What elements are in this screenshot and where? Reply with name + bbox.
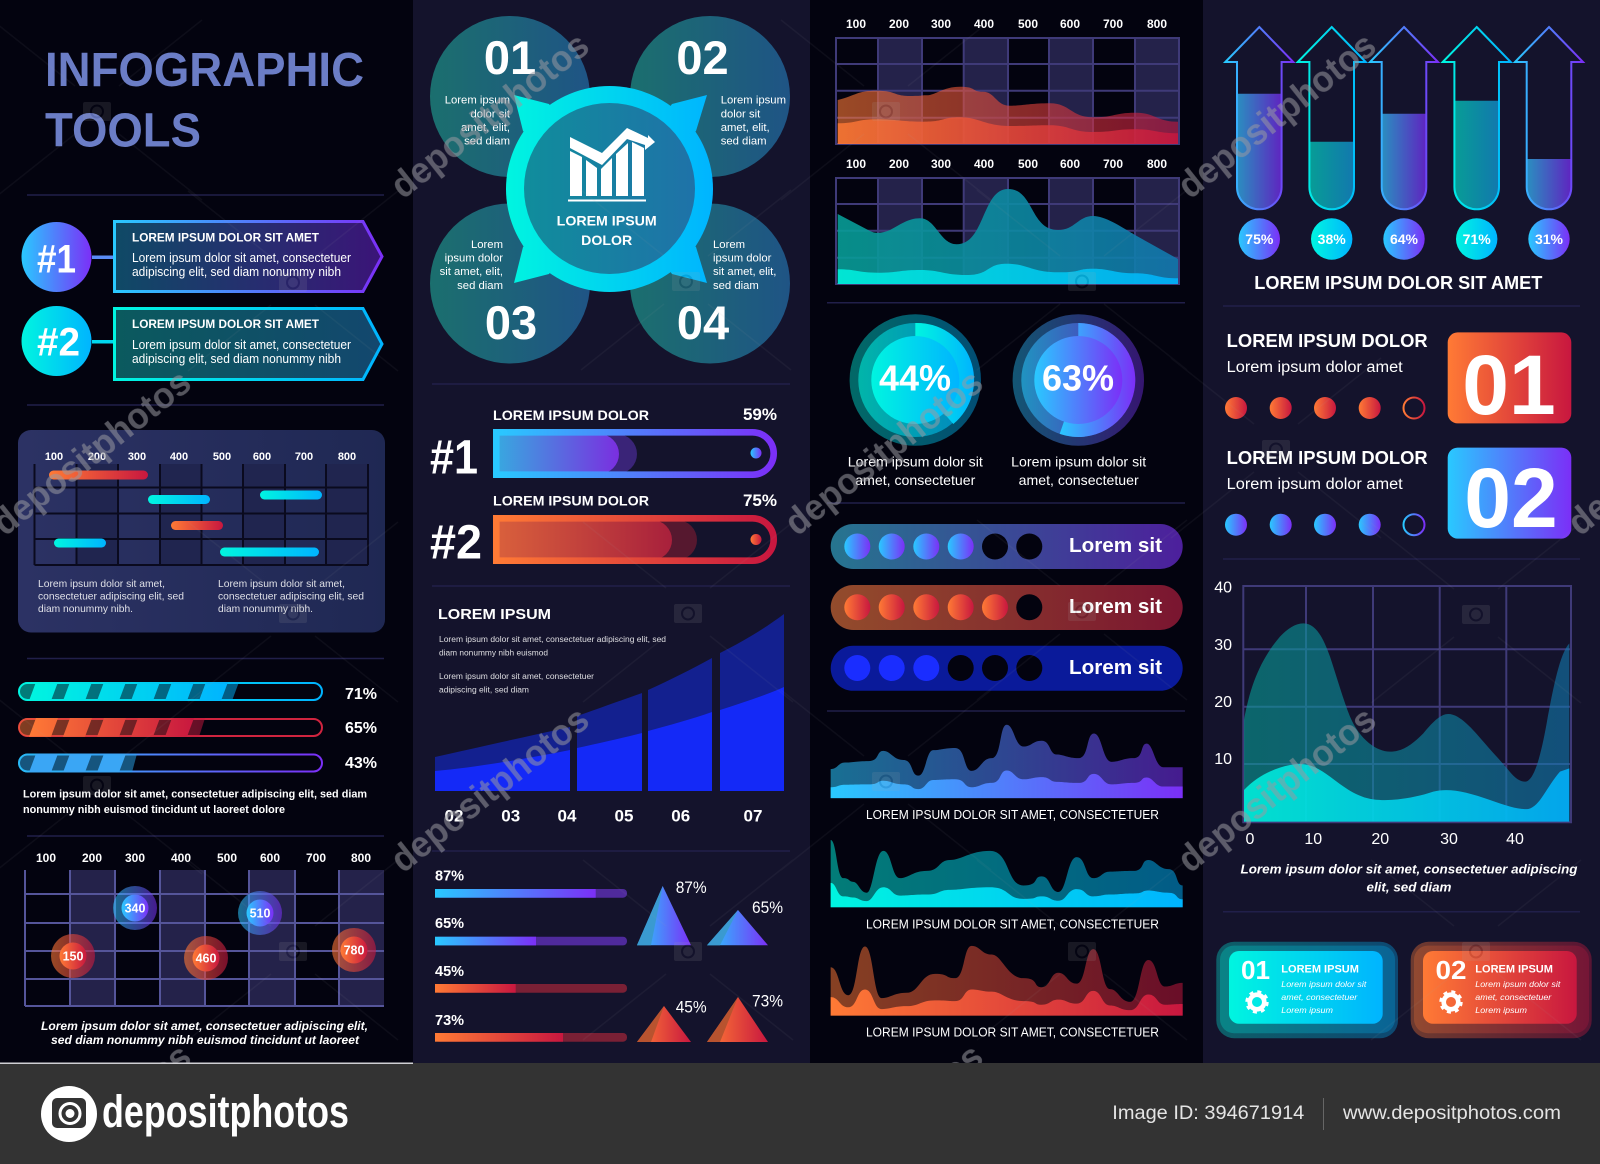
gantt axis labels: 300 xyxy=(128,451,146,463)
pill meter #2: #2 xyxy=(430,517,482,570)
mountain chart cyan: LOREM IPSUM DOLOR SIT AMET, CONSECTETUER xyxy=(866,918,1159,932)
card 02: Lorem ipsum dolor sit xyxy=(1475,979,1561,989)
gantt notes: consectetuer adipiscing elit, sed xyxy=(38,590,184,602)
bubble 150 xyxy=(51,934,95,978)
bubble axis labels: 600 xyxy=(260,851,280,865)
axis labels: 300 xyxy=(931,17,951,31)
chart description: diam nonummy nibh euismod xyxy=(439,649,548,658)
gantt axis labels: 600 xyxy=(253,451,271,463)
watermark overlay: depositphotos xyxy=(382,698,597,880)
card 02: 02 xyxy=(1436,955,1466,985)
chart description: Lorem ipsum dolor sit amet, consectetuer xyxy=(439,672,594,681)
pyramid 73%: 73% xyxy=(752,992,783,1011)
bubble axis labels: 100 xyxy=(36,851,56,865)
petal 04: 04 xyxy=(677,296,729,349)
card 01 xyxy=(1216,942,1398,1038)
teal area chart xyxy=(836,157,1179,284)
petal 04: sed diam xyxy=(713,280,759,292)
callout #1: Lorem ipsum dolor sit amet, consectetuer xyxy=(132,251,351,265)
chart caption xyxy=(1240,861,1578,894)
petal 02 xyxy=(630,16,790,177)
pyramid 45%: 45% xyxy=(676,998,707,1017)
arrow tube 71%: 71% xyxy=(1463,231,1491,247)
bar 73%: 73% xyxy=(435,1013,464,1029)
bubble axis labels: 400 xyxy=(171,851,191,865)
watermark overlay: depositphotos xyxy=(382,24,597,206)
progress note xyxy=(23,789,367,816)
chart description: adipiscing elit, sed diam xyxy=(439,686,529,695)
axis labels xyxy=(846,157,1167,171)
center label: DOLOR xyxy=(581,232,632,248)
tubes heading: LOREM IPSUM DOLOR SIT AMET xyxy=(1254,273,1542,293)
axis labels: 500 xyxy=(1018,17,1038,31)
badge #1 xyxy=(22,222,92,292)
bar 87% xyxy=(435,869,627,898)
arrow tube 75%: 75% xyxy=(1245,231,1274,247)
bubble axis labels: 800 xyxy=(351,851,371,865)
x axis labels: 0 xyxy=(1246,831,1255,848)
area axis labels: 06 xyxy=(671,807,690,826)
title: TOOLS xyxy=(45,104,201,158)
bubble 340: 340 xyxy=(125,902,145,916)
watermark overlay: depositphotos xyxy=(1169,24,1384,206)
pill meter #2: 75% xyxy=(743,491,777,510)
axis labels: 200 xyxy=(889,17,909,31)
bar 65%: 65% xyxy=(435,916,464,932)
mountain chart red: LOREM IPSUM DOLOR SIT AMET, CONSECTETUER xyxy=(866,1026,1159,1040)
badge #2 xyxy=(22,306,92,376)
mountain chart cyan xyxy=(831,840,1183,932)
axis labels: 400 xyxy=(974,17,994,31)
petal 02: Lorem ipsum xyxy=(721,95,786,107)
pyramid 87% xyxy=(637,878,707,945)
icon: bar chart with trend arrow xyxy=(568,128,655,202)
petal 01: sed diam xyxy=(464,136,510,148)
title xyxy=(45,43,364,158)
area axis labels: 04 xyxy=(558,807,577,826)
callout #2: Lorem ipsum dolor sit amet, consectetuer xyxy=(132,338,351,352)
score block 01: LOREM IPSUM DOLOR xyxy=(1227,331,1428,351)
petal 03: sed diam xyxy=(457,280,503,292)
pyramid 45% xyxy=(637,998,707,1042)
petal 01: 01 xyxy=(484,31,536,84)
bubble 780 xyxy=(332,928,376,972)
arrow tube 71% xyxy=(1443,27,1511,260)
pyramid 73% xyxy=(707,992,783,1042)
x axis labels xyxy=(1246,831,1524,848)
area columns xyxy=(435,614,784,791)
bubble 340 xyxy=(113,886,157,930)
arrow tube 38% xyxy=(1298,27,1366,260)
callout #2: adipiscing elit, sed diam nonummy nibh xyxy=(132,352,341,366)
bar 71%: 71% xyxy=(345,686,377,703)
callout #1: adipiscing elit, sed diam nonummy nibh xyxy=(132,265,341,279)
logo xyxy=(41,1086,349,1142)
image id: Image ID: 394671914 xyxy=(1112,1102,1304,1124)
area axis labels: 05 xyxy=(615,807,633,826)
arrow tube 38%: 38% xyxy=(1318,231,1346,247)
petal 02: 02 xyxy=(676,31,729,84)
rating pill 2 xyxy=(831,585,1183,630)
gantt notes: diam nonummy nibh. xyxy=(38,603,133,615)
axis labels: 600 xyxy=(1060,157,1080,171)
y axis labels xyxy=(1214,580,1232,768)
bar 71% xyxy=(18,682,377,703)
bubble axis labels: 300 xyxy=(125,851,145,865)
gantt notes xyxy=(38,578,364,615)
arrow tube 64% xyxy=(1370,27,1438,260)
rating pill 2: Lorem sit xyxy=(1069,596,1162,618)
gantt notes: consectetuer adipiscing elit, sed xyxy=(218,590,364,602)
large area chart xyxy=(1214,580,1578,894)
card 01: LOREM IPSUM xyxy=(1281,963,1359,975)
pill meter #1: 59% xyxy=(743,405,777,424)
petal 02: amet, elit, xyxy=(721,122,770,134)
bubble caption: sed diam nonummy nibh euismod tincidunt ut laoreet xyxy=(51,1033,360,1047)
score block 02: 02 xyxy=(1464,451,1558,545)
bubble caption: Lorem ipsum dolor sit amet, consectetuer adipiscing elit, xyxy=(41,1019,368,1033)
axis labels: 300 xyxy=(931,157,951,171)
callout #1 xyxy=(22,222,382,292)
donut 63%: amet, consectetuer xyxy=(1019,472,1139,488)
area axis labels: 02 xyxy=(445,807,463,826)
callout #2 xyxy=(22,306,382,380)
growth area chart xyxy=(435,606,784,826)
donut 63%: 63% xyxy=(1042,358,1114,399)
arrow box #1 xyxy=(114,222,382,292)
petal 03: Lorem xyxy=(471,239,503,251)
area axis labels xyxy=(445,807,762,826)
progress note: Lorem ipsum dolor sit amet, consectetuer adipiscing elit, sed diam xyxy=(23,789,367,801)
x axis labels: 40 xyxy=(1506,831,1524,848)
bubble caption xyxy=(41,1019,368,1047)
central star badge xyxy=(514,95,707,283)
red area chart xyxy=(836,17,1179,144)
gantt bars xyxy=(49,470,322,556)
gantt axis labels: 100 xyxy=(45,451,63,463)
petal diagram xyxy=(430,16,790,364)
score block 01 xyxy=(1225,331,1571,432)
site url: www.depositphotos.com xyxy=(1342,1102,1561,1124)
center label: LOREM IPSUM xyxy=(557,213,657,229)
card 02: Lorem ipsum xyxy=(1475,1005,1527,1015)
pill meter #2: LOREM IPSUM DOLOR xyxy=(493,493,649,509)
callout #2: #2 xyxy=(37,320,80,364)
arrow box #2 xyxy=(114,308,382,380)
chart caption: Lorem ipsum dolor sit amet, consectetuer adipiscing xyxy=(1240,861,1578,876)
y axis labels: 40 xyxy=(1214,580,1232,597)
pill meter #1 xyxy=(430,405,777,484)
pill meter #1: #1 xyxy=(430,432,478,484)
donut 63% xyxy=(1011,314,1146,488)
callout #1: #1 xyxy=(37,238,76,282)
bubble 780: 780 xyxy=(344,944,364,958)
axis labels: 800 xyxy=(1147,157,1167,171)
y axis labels: 20 xyxy=(1214,694,1232,711)
axis labels: 700 xyxy=(1103,157,1123,171)
x axis labels: 30 xyxy=(1440,831,1458,848)
icon: gear xyxy=(1441,992,1461,1012)
card 01: Lorem ipsum dolor sit xyxy=(1281,979,1367,989)
bar 45% xyxy=(435,964,627,993)
bar 45%: 45% xyxy=(435,964,464,980)
petal 04 xyxy=(630,204,790,364)
rating pill 3 xyxy=(831,646,1183,691)
bubble 460: 460 xyxy=(196,952,216,966)
area axis labels: 07 xyxy=(744,807,762,826)
arrow tube 75% xyxy=(1225,27,1293,260)
card 01: Lorem ipsum xyxy=(1281,1005,1333,1015)
area axis labels: 03 xyxy=(501,807,520,826)
score block 02: LOREM IPSUM DOLOR xyxy=(1227,448,1428,468)
x axis labels: 10 xyxy=(1304,831,1322,848)
petal 03 xyxy=(430,204,590,364)
petal 01: Lorem ipsum xyxy=(445,95,510,107)
pyramid 65% xyxy=(707,898,783,945)
card 01: amet, consectetuer xyxy=(1281,992,1359,1002)
bubble axis labels: 500 xyxy=(217,851,237,865)
axis labels: 400 xyxy=(974,157,994,171)
bubble 510: 510 xyxy=(250,906,270,920)
petal 02: dolor sit xyxy=(721,108,761,120)
y axis labels: 10 xyxy=(1214,751,1232,768)
axis labels: 500 xyxy=(1018,157,1038,171)
bar 73% xyxy=(435,1013,627,1042)
mountain chart red xyxy=(831,946,1183,1040)
bubble 510 xyxy=(238,891,282,935)
axis labels: 600 xyxy=(1060,17,1080,31)
score block 01: 01 xyxy=(1462,338,1556,432)
gantt axis labels: 500 xyxy=(213,451,231,463)
watermark overlay: depositphotos xyxy=(1169,698,1384,880)
pyramid 65%: 65% xyxy=(752,898,783,917)
gantt axis labels: 400 xyxy=(170,451,188,463)
icon: gear xyxy=(1247,992,1267,1012)
bubble axis labels: 700 xyxy=(306,851,326,865)
petal 01: amet, elit, xyxy=(461,122,510,134)
arrow tube 64%: 64% xyxy=(1390,231,1419,247)
bubble chart xyxy=(25,851,384,1047)
axis labels: 100 xyxy=(846,17,866,31)
mountain chart purple: LOREM IPSUM DOLOR SIT AMET, CONSECTETUER xyxy=(866,808,1159,822)
title: INFOGRAPHIC xyxy=(45,43,364,97)
axis labels: 100 xyxy=(846,157,866,171)
bubble 150: 150 xyxy=(63,950,83,964)
callout #2: LOREM IPSUM DOLOR SIT AMET xyxy=(132,317,320,331)
chart caption: elit, sed diam xyxy=(1366,879,1452,894)
rating pill 1 xyxy=(831,524,1183,569)
axis labels: 200 xyxy=(889,157,909,171)
y axis labels: 30 xyxy=(1214,637,1232,654)
chart heading: LOREM IPSUM xyxy=(438,606,551,623)
gantt axis labels: 700 xyxy=(295,451,313,463)
gantt notes: diam nonummy nibh. xyxy=(218,603,313,615)
petal 04: ipsum dolor xyxy=(713,252,772,264)
bar 43% xyxy=(18,754,377,772)
petal 04: sit amet, elit, xyxy=(713,266,776,278)
arrow tube 31% xyxy=(1515,27,1583,260)
x axis labels: 20 xyxy=(1371,831,1389,848)
footer bar xyxy=(0,1062,1600,1164)
thin progress bars xyxy=(435,869,627,1042)
axis labels xyxy=(846,17,1167,31)
donut 44%: Lorem ipsum dolor sit xyxy=(848,454,983,470)
rating pill 3: Lorem sit xyxy=(1069,657,1162,679)
petal 02: sed diam xyxy=(721,136,767,148)
rating pill 1: Lorem sit xyxy=(1069,535,1162,557)
bubble axis labels xyxy=(36,851,371,865)
petal 01 xyxy=(430,16,590,177)
bar 87%: 87% xyxy=(435,869,464,885)
progress note: nonummy nibh euismod tincidunt ut laoreet dolore xyxy=(23,804,285,816)
gantt notes: Lorem ipsum dolor sit amet, xyxy=(218,578,345,590)
donut 63%: Lorem ipsum dolor sit xyxy=(1011,454,1146,470)
bubble axis labels: 200 xyxy=(82,851,102,865)
bar 43%: 43% xyxy=(345,755,377,772)
pill meter #1: LOREM IPSUM DOLOR xyxy=(493,407,649,423)
bar 65% xyxy=(18,718,377,737)
donut 44%: 44% xyxy=(879,358,951,399)
gantt notes: Lorem ipsum dolor sit amet, xyxy=(38,578,165,590)
petal 03: 03 xyxy=(485,296,537,349)
bubble 460 xyxy=(184,936,228,980)
axis labels: 700 xyxy=(1103,17,1123,31)
donut 44% xyxy=(848,314,983,488)
pill meter #2 xyxy=(430,491,777,570)
center label xyxy=(557,213,657,248)
logo: depositphotos xyxy=(102,1086,349,1137)
bar 65% xyxy=(435,916,627,945)
petal 01: dolor sit xyxy=(470,108,511,120)
gantt axis labels: 200 xyxy=(88,451,106,463)
watermark overlay: depositphotos xyxy=(776,361,991,543)
card 02 xyxy=(1411,942,1592,1038)
callout #1: LOREM IPSUM DOLOR SIT AMET xyxy=(132,230,320,244)
panel: gantt chart xyxy=(18,430,385,632)
petal 04: Lorem xyxy=(713,239,745,251)
card 02: amet, consectetuer xyxy=(1475,992,1553,1002)
axis labels: 800 xyxy=(1147,17,1167,31)
card 02: LOREM IPSUM xyxy=(1475,963,1553,975)
gantt axis labels xyxy=(45,451,356,463)
card 01: 01 xyxy=(1241,955,1270,985)
mountain chart purple xyxy=(831,725,1183,822)
petal 03: sit amet, elit, xyxy=(440,266,503,278)
petal 03: ipsum dolor xyxy=(445,252,503,264)
chart description: Lorem ipsum dolor sit amet, consectetuer adipiscing elit, sed xyxy=(439,635,666,644)
score block 02: Lorem ipsum dolor amet xyxy=(1227,476,1403,493)
score block 02 xyxy=(1225,448,1571,545)
striped progress bars xyxy=(18,682,377,816)
donut 44%: amet, consectetuer xyxy=(855,472,976,488)
chart description xyxy=(439,635,666,695)
bar 65%: 65% xyxy=(345,720,377,737)
score block 01: Lorem ipsum dolor amet xyxy=(1227,359,1403,376)
arrow tube 31%: 31% xyxy=(1535,231,1564,247)
pyramid 87%: 87% xyxy=(676,878,707,897)
gantt axis labels: 800 xyxy=(338,451,356,463)
